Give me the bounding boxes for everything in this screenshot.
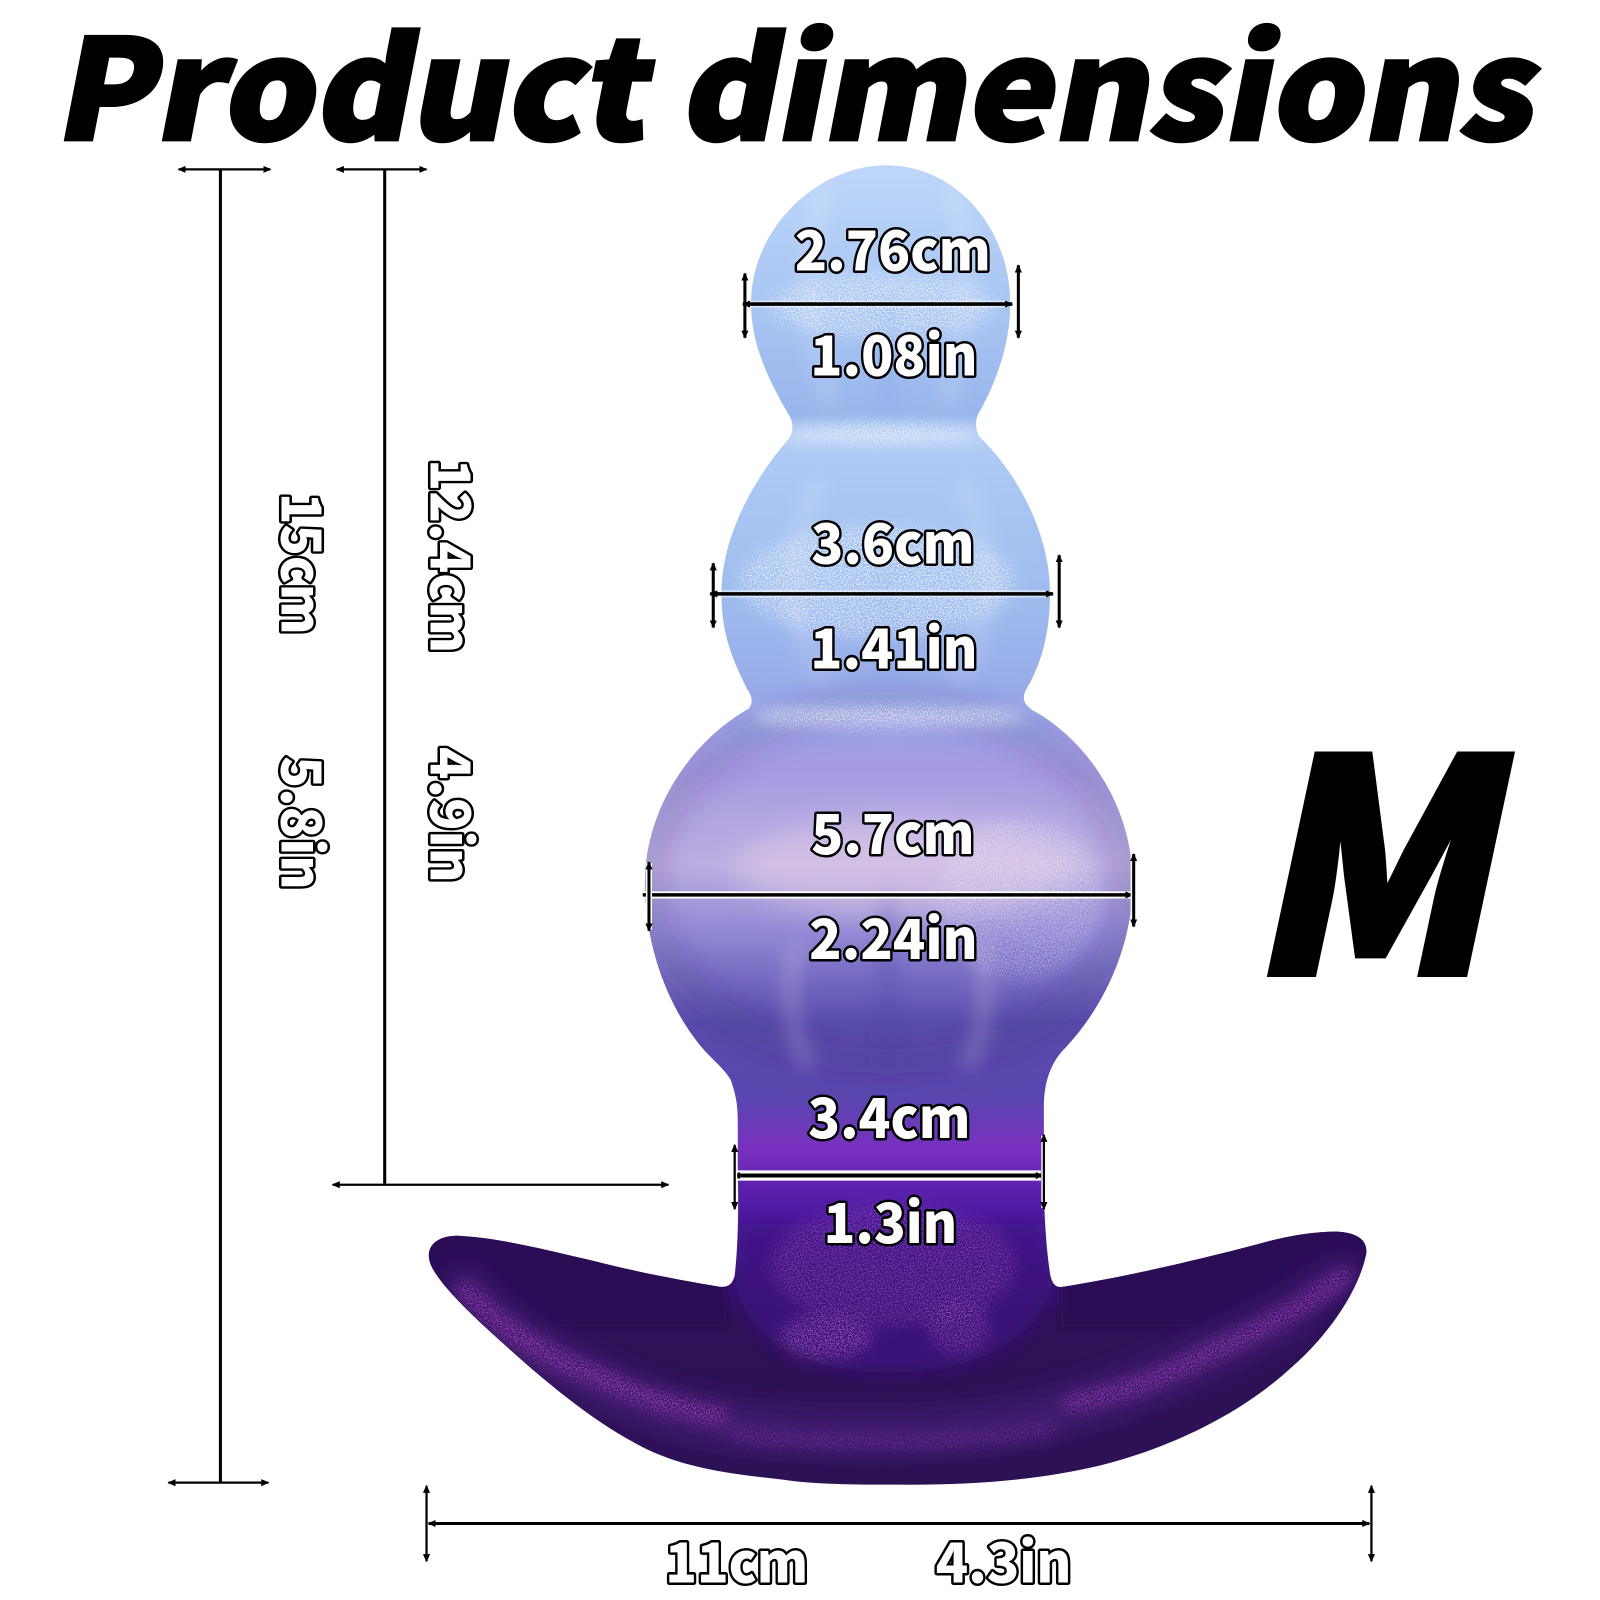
central light band	[735, 818, 1082, 916]
dimension: stem width	[733, 1135, 1044, 1209]
sparkle on upper body	[740, 273, 1102, 980]
product silhouette	[408, 165, 1388, 1485]
label 3.4cm: 3.4cm	[808, 1074, 970, 1154]
label 12.4cm: 12.4cm	[415, 459, 495, 653]
surface shading and ribs	[408, 194, 1388, 1443]
dark flange overlay	[428, 1232, 1366, 1330]
size letter M: M	[1228, 632, 1562, 1061]
dimension: base width	[427, 1486, 1371, 1561]
label 1.08in: 1.08in	[810, 312, 978, 392]
dimension: widest section	[643, 854, 1134, 931]
label 1.41in: 1.41in	[810, 604, 978, 684]
label 2.24in: 2.24in	[809, 895, 978, 975]
label 15cm: 15cm	[266, 493, 346, 635]
base sheen	[464, 1276, 1344, 1443]
label 2.76cm: 2.76cm	[795, 206, 991, 286]
product body	[429, 165, 1366, 1485]
dimension: middle section width	[710, 555, 1059, 628]
label 5.7cm: 5.7cm	[811, 790, 974, 870]
label 1.3in: 1.3in	[823, 1179, 957, 1259]
dimension: top section width	[743, 265, 1018, 338]
label 5.8in: 5.8in	[266, 756, 346, 890]
label 11cm: 11cm	[665, 1519, 808, 1599]
dimension: insertable length 12.4cm	[333, 169, 668, 1185]
dimension: overall length 15cm	[168, 169, 270, 1483]
stem flare into base	[737, 1224, 1053, 1372]
edge shading of large sphere	[646, 704, 1132, 1061]
label 4.9in: 4.9in	[415, 747, 495, 883]
stem sparkle	[770, 1204, 1015, 1359]
label 4.3in: 4.3in	[936, 1519, 1071, 1599]
label 3.6cm: 3.6cm	[811, 499, 974, 579]
